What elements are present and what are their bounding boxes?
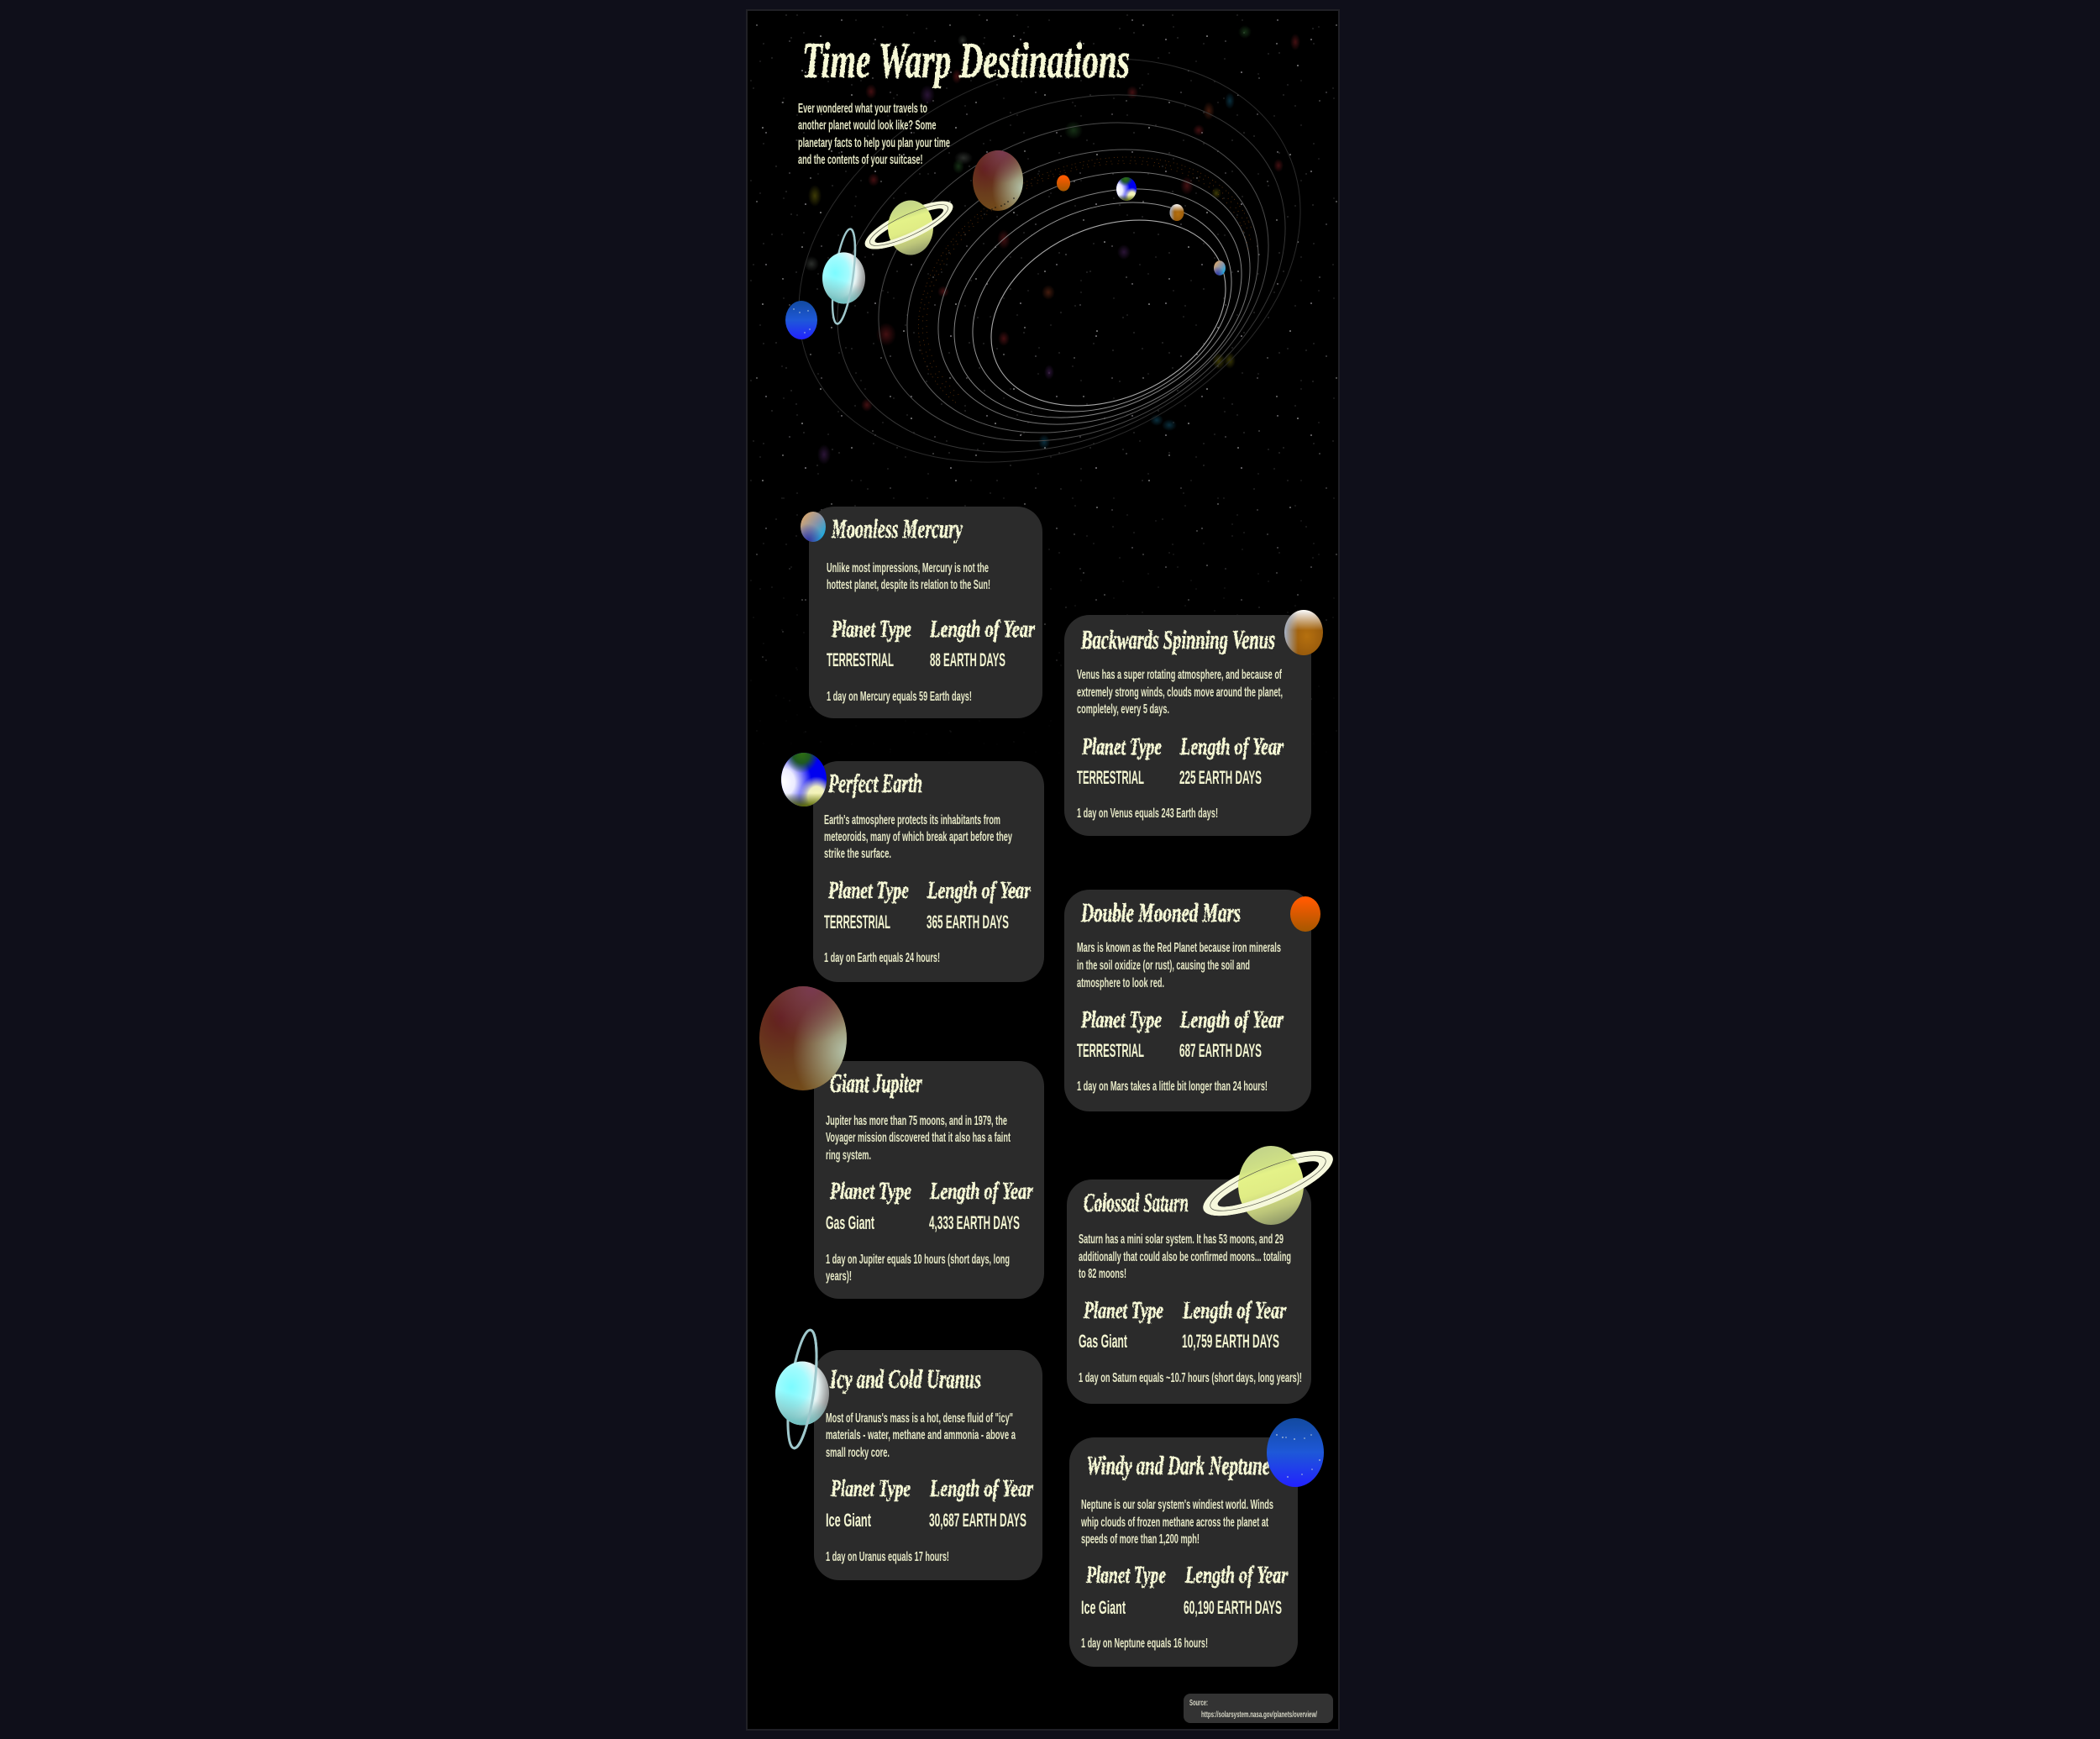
description: Neptune — [1080, 1498, 1273, 1547]
icon: Mars planet — [1290, 896, 1320, 932]
poster background — [747, 10, 1339, 1730]
intro text: and the contents of your suitcase! — [798, 153, 922, 167]
value: ice giant: Ice Giant — [826, 1510, 871, 1531]
panel: Jupiter — [759, 986, 1044, 1299]
description: Jupiter: ring system. — [826, 1148, 871, 1163]
panel: Neptune — [1069, 1418, 1324, 1667]
description: Saturn: Saturn has a mini solar system. It has 53 moons, and 29 — [1079, 1232, 1284, 1247]
heading: Backwards Spinning Venus: Backwards Spinning Venus — [1080, 624, 1275, 654]
description: Mars — [1077, 941, 1281, 990]
description: Jupiter: Voyager mission discovered that it also has a faint — [826, 1131, 1011, 1145]
description: Venus: completely, every 5 days. — [1077, 702, 1169, 717]
description: Mercury: hottest planet, despite its relation to the Sun! — [827, 578, 990, 592]
solar system planets — [785, 150, 1226, 339]
description: Earth: strike the surface. — [824, 847, 891, 861]
description: Neptune: whip clouds of frozen methane across the planet at — [1080, 1516, 1268, 1530]
intro text: Ever wondered what your travels to — [798, 102, 927, 116]
label: planet type: Planet Type — [831, 616, 911, 643]
icon: Saturn planet with rings — [1203, 1146, 1333, 1225]
planet: Mercury (orbit) — [1214, 260, 1226, 276]
description: Mars: Mars is known as the Red Planet because iron minerals — [1077, 941, 1281, 955]
fact: Earth day: 1 day on Earth equals 24 hours! — [824, 951, 940, 965]
icon: Mercury planet — [801, 512, 826, 542]
panel: Venus — [1064, 610, 1323, 836]
value: terrestrial: TERRESTRIAL — [824, 912, 890, 933]
star field — [747, 10, 1339, 766]
title: Time Warp Destinations — [802, 33, 1130, 88]
value: 687 earth days: 687 EARTH DAYS — [1179, 1040, 1262, 1061]
description: Earth: Earth's atmosphere protects its inhabitants from — [824, 813, 1000, 827]
fact: Jupiter day: years)! — [826, 1269, 852, 1284]
panel: Saturn — [1067, 1138, 1340, 1404]
fact: Jupiter day: 1 day on Jupiter equals 10 hours (short days, long — [826, 1253, 1010, 1267]
description: Venus — [1077, 668, 1283, 717]
planet: Earth (orbit) — [1116, 177, 1137, 201]
value: gas giant: Gas Giant — [826, 1212, 874, 1233]
value: terrestrial: TERRESTRIAL — [1077, 767, 1144, 788]
description: Uranus — [826, 1411, 1016, 1460]
heading: Perfect Earth: Perfect Earth — [827, 768, 922, 798]
value: 4,333 earth days: 4,333 EARTH DAYS — [929, 1212, 1020, 1233]
fact: Jupiter day — [826, 1253, 1010, 1284]
description: Saturn — [1079, 1232, 1291, 1281]
value: terrestrial: TERRESTRIAL — [1077, 1040, 1144, 1061]
fact: Neptune day: 1 day on Neptune equals 16 hours! — [1081, 1637, 1208, 1651]
description: Earth: meteoroids, many of which break apart before they — [824, 830, 1012, 844]
intro text: planetary facts to help you plan your time — [798, 136, 950, 150]
description: Uranus: Most of Uranus's mass is a hot, dense fluid of "icy" — [826, 1411, 1013, 1426]
description: Mercury — [827, 561, 990, 592]
label: planet type: Planet Type — [829, 1178, 911, 1205]
description: Earth — [824, 813, 1012, 861]
source url: https://solarsystem.nasa.gov/planets/overview/ — [1201, 1710, 1317, 1720]
description: Mars: in the soil oxidize (or rust), causing the soil and — [1077, 959, 1250, 973]
fact: Mercury day: 1 day on Mercury equals 59 Earth days! — [827, 690, 972, 704]
heading: Double Mooned Mars: Double Mooned Mars — [1080, 897, 1241, 927]
icon: Uranus planet with ring — [775, 1329, 829, 1450]
description: Venus: extremely strong winds, clouds move around the planet, — [1077, 686, 1283, 700]
value: 365 earth days: 365 EARTH DAYS — [927, 912, 1009, 933]
value: 88 earth days: 88 EARTH DAYS — [930, 649, 1005, 670]
source label: Source: — [1189, 1699, 1208, 1708]
value: 60,190 earth days: 60,190 EARTH DAYS — [1184, 1597, 1282, 1618]
planet: Jupiter (orbit) — [973, 150, 1023, 211]
value: ice giant: Ice Giant — [1081, 1597, 1126, 1618]
icon: Jupiter planet — [759, 986, 847, 1090]
orbit rings — [798, 58, 1300, 463]
description: Mercury: Unlike most impressions, Mercury is not the — [827, 561, 989, 575]
label: planet type: Planet Type — [830, 1475, 911, 1502]
fact: Saturn day: 1 day on Saturn equals ~10.7 hours (short days, long years)! — [1079, 1371, 1302, 1385]
heading: Colossal Saturn: Colossal Saturn — [1084, 1187, 1189, 1217]
label: length of year: Length of Year — [929, 1178, 1033, 1205]
value: terrestrial: TERRESTRIAL — [827, 649, 894, 670]
label: length of year: Length of Year — [1182, 1297, 1286, 1324]
icon: Earth planet — [781, 753, 827, 806]
planet: Neptune (orbit) — [785, 301, 817, 339]
label: length of year: Length of Year — [929, 1475, 1033, 1502]
heading: Giant Jupiter: Giant Jupiter — [830, 1068, 922, 1098]
heading: Icy and Cold Uranus: Icy and Cold Uranus — [829, 1363, 981, 1394]
value: 10,759 earth days: 10,759 EARTH DAYS — [1182, 1331, 1279, 1352]
label: length of year: Length of Year — [1179, 733, 1284, 760]
planet: Mars (orbit) — [1057, 175, 1070, 192]
icon: Neptune planet — [1267, 1418, 1324, 1487]
source box — [1184, 1694, 1333, 1723]
description: Jupiter: Jupiter has more than 75 moons, and in 1979, the — [826, 1114, 1007, 1128]
label: planet type: Planet Type — [827, 877, 909, 904]
nebula bokeh spots — [804, 25, 1300, 465]
label: planet type: Planet Type — [1081, 733, 1162, 760]
fact: Uranus day: 1 day on Uranus equals 17 hours! — [826, 1550, 949, 1564]
description: Saturn: to 82 moons! — [1079, 1267, 1126, 1281]
label: length of year: Length of Year — [927, 877, 1031, 904]
value: gas giant: Gas Giant — [1079, 1331, 1127, 1352]
planet: Uranus (orbit) — [822, 228, 865, 325]
label: length of year: Length of Year — [929, 616, 1035, 643]
panel: Earth — [781, 753, 1044, 982]
description: Jupiter — [826, 1114, 1011, 1163]
icon: Venus planet — [1284, 610, 1323, 655]
planet: Saturn (orbit) — [865, 200, 953, 255]
description: Uranus: materials - water, methane and ammonia - above a — [826, 1428, 1016, 1442]
panel: Uranus — [764, 1326, 1042, 1580]
label: length of year: Length of Year — [1184, 1562, 1288, 1589]
label: planet type: Planet Type — [1080, 1006, 1162, 1033]
fact: Venus day: 1 day on Venus equals 243 Earth days! — [1077, 806, 1218, 821]
panel: Mars — [1064, 890, 1320, 1111]
intro text: another planet would look like? Some — [798, 118, 937, 133]
label: planet type: Planet Type — [1085, 1562, 1166, 1589]
description: Neptune: speeds of more than 1,200 mph! — [1081, 1532, 1200, 1547]
description: Mars: atmosphere to look red. — [1077, 976, 1164, 990]
description: Uranus: small rocky core. — [826, 1446, 890, 1460]
heading: Windy and Dark Neptune: Windy and Dark Neptune — [1086, 1450, 1270, 1480]
planet: Venus (orbit) — [1169, 204, 1184, 221]
label: length of year: Length of Year — [1179, 1006, 1284, 1033]
description: Saturn: additionally that could also be confirmed moons... totaling — [1079, 1250, 1291, 1264]
description: Venus: Venus has a super rotating atmosphere, and because of — [1077, 668, 1282, 682]
label: planet type: Planet Type — [1083, 1297, 1163, 1324]
value: 30,687 earth days: 30,687 EARTH DAYS — [929, 1510, 1026, 1531]
description: Neptune: Neptune is our solar system's windiest world. Winds — [1081, 1498, 1273, 1512]
value: 225 earth days: 225 EARTH DAYS — [1179, 767, 1262, 788]
intro text — [798, 102, 950, 167]
panel: Mercury — [801, 507, 1042, 718]
heading: Moonless Mercury: Moonless Mercury — [831, 513, 963, 544]
fact: Mars day: 1 day on Mars takes a little bit longer than 24 hours! — [1077, 1080, 1268, 1094]
